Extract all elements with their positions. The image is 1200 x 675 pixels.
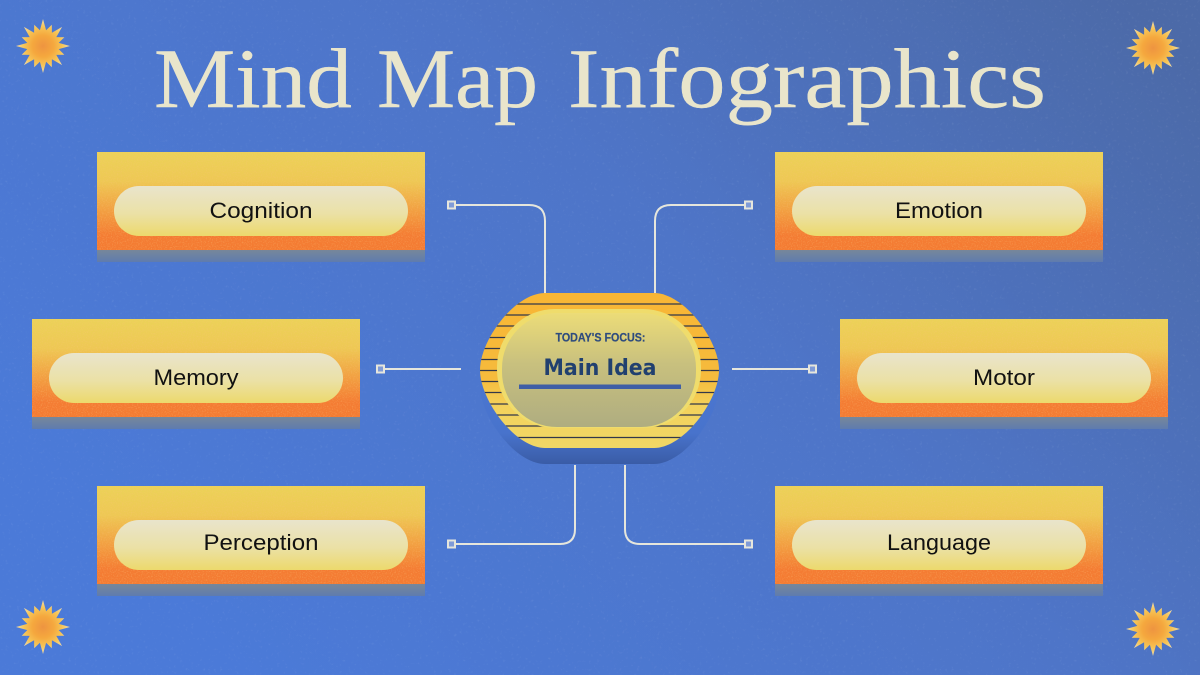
underline <box>519 384 681 389</box>
label: Memory: Memory <box>154 365 238 390</box>
connector: Motor <box>732 366 816 372</box>
icon: sun top right <box>1126 21 1180 75</box>
title <box>154 32 1046 126</box>
panel: Memory <box>32 319 360 429</box>
label: Motor: Motor <box>973 365 1035 390</box>
title: Infographics <box>568 32 1046 126</box>
central node: Main Idea <box>480 293 719 464</box>
label: Perception: Perception <box>204 530 318 555</box>
icon: sun bottom left <box>16 600 70 654</box>
connector: Memory <box>377 366 461 372</box>
icon: sun top left <box>16 19 70 73</box>
label: Today's focus: TODAY'S FOCUS: <box>556 332 646 344</box>
label: Cognition: Cognition <box>210 198 312 223</box>
connector: Cognition <box>448 202 545 293</box>
title: Mind <box>154 32 352 126</box>
label: Emotion: Emotion <box>895 198 983 223</box>
connector: Language <box>625 465 752 548</box>
label: Main Idea: Main Idea <box>544 356 656 381</box>
panel: Cognition <box>97 152 425 262</box>
panel: Perception <box>97 486 425 596</box>
panel: Language <box>775 486 1103 596</box>
connector: Perception <box>448 465 575 548</box>
panel: Emotion <box>775 152 1103 262</box>
panel: Motor <box>840 319 1168 429</box>
title: Map <box>377 32 538 126</box>
icon: sun bottom right <box>1126 602 1180 656</box>
connector: Emotion <box>655 202 752 293</box>
label: Language: Language <box>887 530 991 555</box>
